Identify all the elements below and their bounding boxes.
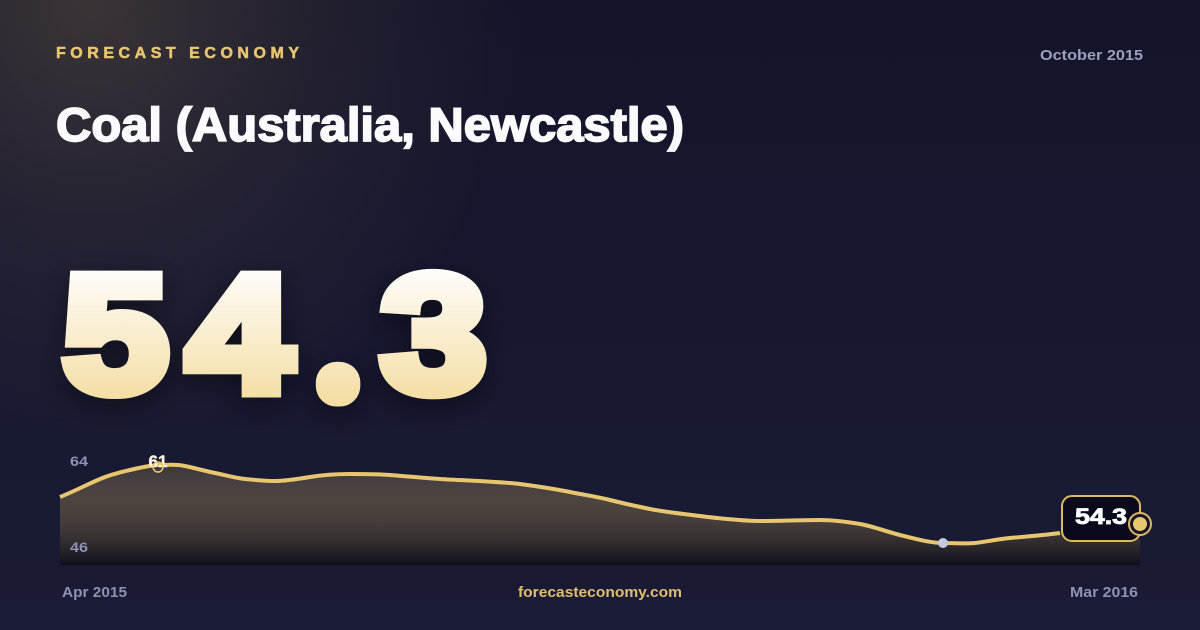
brand label: FORECAST ECONOMY — [56, 45, 299, 62]
headline value — [63, 241, 486, 426]
website: forecasteconomy.com — [518, 584, 682, 601]
headline value: 3 — [381, 241, 486, 426]
low point marker — [938, 538, 948, 548]
title: Coal (Australia, Newcastle) — [56, 98, 684, 151]
chart line — [60, 465, 1060, 543]
y axis max: 64 — [70, 453, 88, 469]
headline value: . — [335, 365, 341, 392]
headline value: 5 — [63, 241, 168, 426]
date label: October 2015 — [1040, 47, 1143, 64]
chart area fill — [60, 465, 1140, 565]
end date: Mar 2016 — [1070, 584, 1138, 601]
headline value: 4 — [187, 241, 292, 426]
start date: Apr 2015 — [62, 584, 127, 601]
line chart — [60, 452, 1151, 565]
current value callout: 54.3 — [1075, 504, 1127, 529]
current value callout — [1062, 496, 1151, 541]
high point marker: 61 — [149, 452, 167, 471]
y axis min: 46 — [70, 539, 88, 555]
